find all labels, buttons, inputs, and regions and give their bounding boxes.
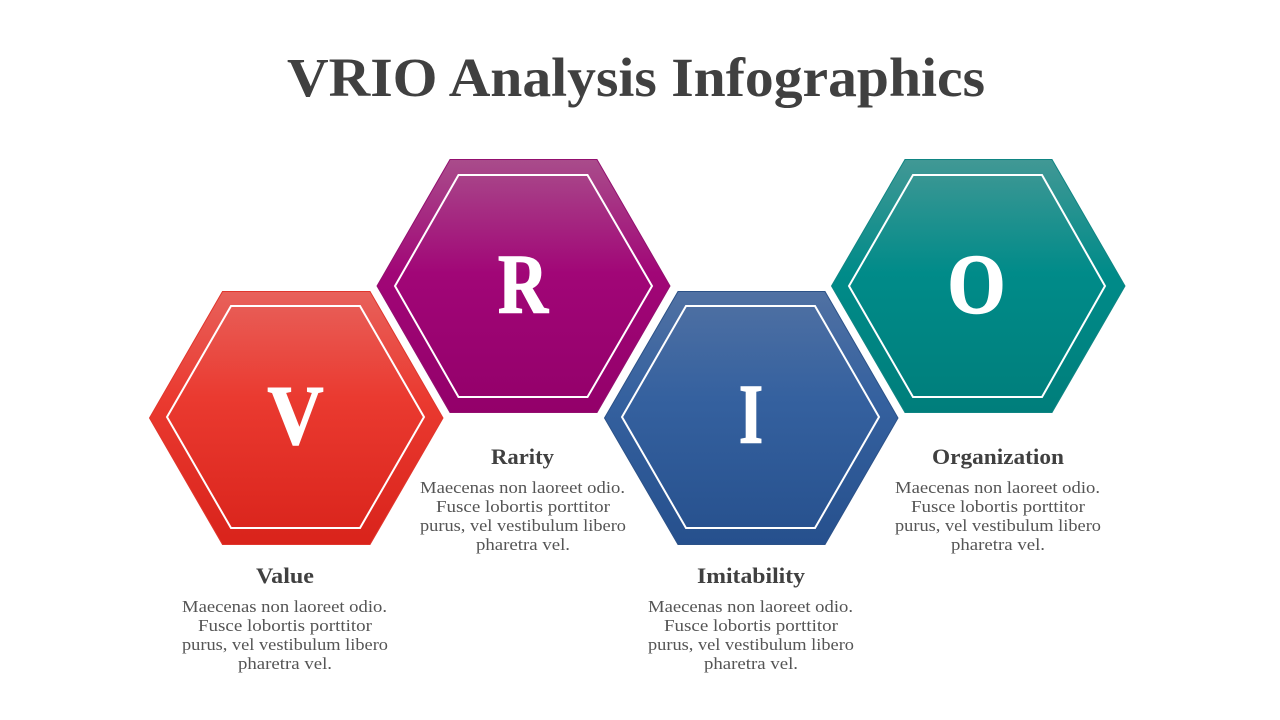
body: rarity	[420, 478, 626, 554]
text block: rarity	[420, 444, 626, 554]
body: value: Fusce lobortis porttitor	[198, 616, 372, 635]
heading: value: Value	[256, 563, 314, 588]
heading: organization: Organization	[932, 444, 1064, 469]
text block: imitability	[648, 563, 854, 673]
body: organization: Maecenas non laoreet odio.	[895, 478, 1100, 497]
text block: organization	[895, 444, 1101, 554]
heading: imitability: Imitability	[697, 563, 805, 588]
body: imitability: purus, vel vestibulum libero	[648, 635, 854, 654]
letter I: I	[739, 368, 763, 462]
body: organization: Fusce lobortis porttitor	[911, 497, 1085, 516]
body: value	[182, 597, 388, 673]
hexagon: imitability outer	[604, 292, 898, 544]
body: rarity: Fusce lobortis porttitor	[436, 497, 610, 516]
body: value: purus, vel vestibulum libero	[182, 635, 388, 654]
hexagon: value inner outline	[167, 306, 424, 528]
body: rarity: Maecenas non laoreet odio.	[420, 478, 625, 497]
body: rarity: purus, vel vestibulum libero	[420, 516, 626, 535]
body: rarity: pharetra vel.	[476, 535, 570, 554]
panel: organization hexagon	[832, 160, 1125, 412]
body: organization	[895, 478, 1101, 554]
heading: rarity: Rarity	[491, 444, 554, 469]
hexagon: organization inner outline	[849, 175, 1105, 397]
title: VRIO Analysis Infographics	[287, 47, 985, 108]
letter O: O	[948, 238, 1006, 332]
letter V: V	[268, 368, 324, 462]
body: imitability: Fusce lobortis porttitor	[664, 616, 838, 635]
body: organization: purus, vel vestibulum libero	[895, 516, 1101, 535]
hexagon: imitability inner outline	[622, 306, 879, 528]
panel: rarity hexagon	[377, 160, 670, 412]
hexagon: rarity outer	[377, 160, 670, 412]
panel: value hexagon	[150, 292, 443, 544]
body: imitability: pharetra vel.	[704, 654, 798, 673]
body: imitability: Maecenas non laoreet odio.	[648, 597, 853, 616]
body: imitability	[648, 597, 854, 673]
body: organization: pharetra vel.	[951, 535, 1045, 554]
panel: imitability hexagon	[604, 292, 898, 544]
hexagon: rarity inner outline	[395, 175, 652, 397]
text block: value	[182, 563, 388, 673]
body: value: Maecenas non laoreet odio.	[182, 597, 387, 616]
hexagon: organization outer	[832, 160, 1125, 412]
hexagon: value outer	[150, 292, 443, 544]
letter R: R	[498, 238, 549, 332]
body: value: pharetra vel.	[238, 654, 332, 673]
